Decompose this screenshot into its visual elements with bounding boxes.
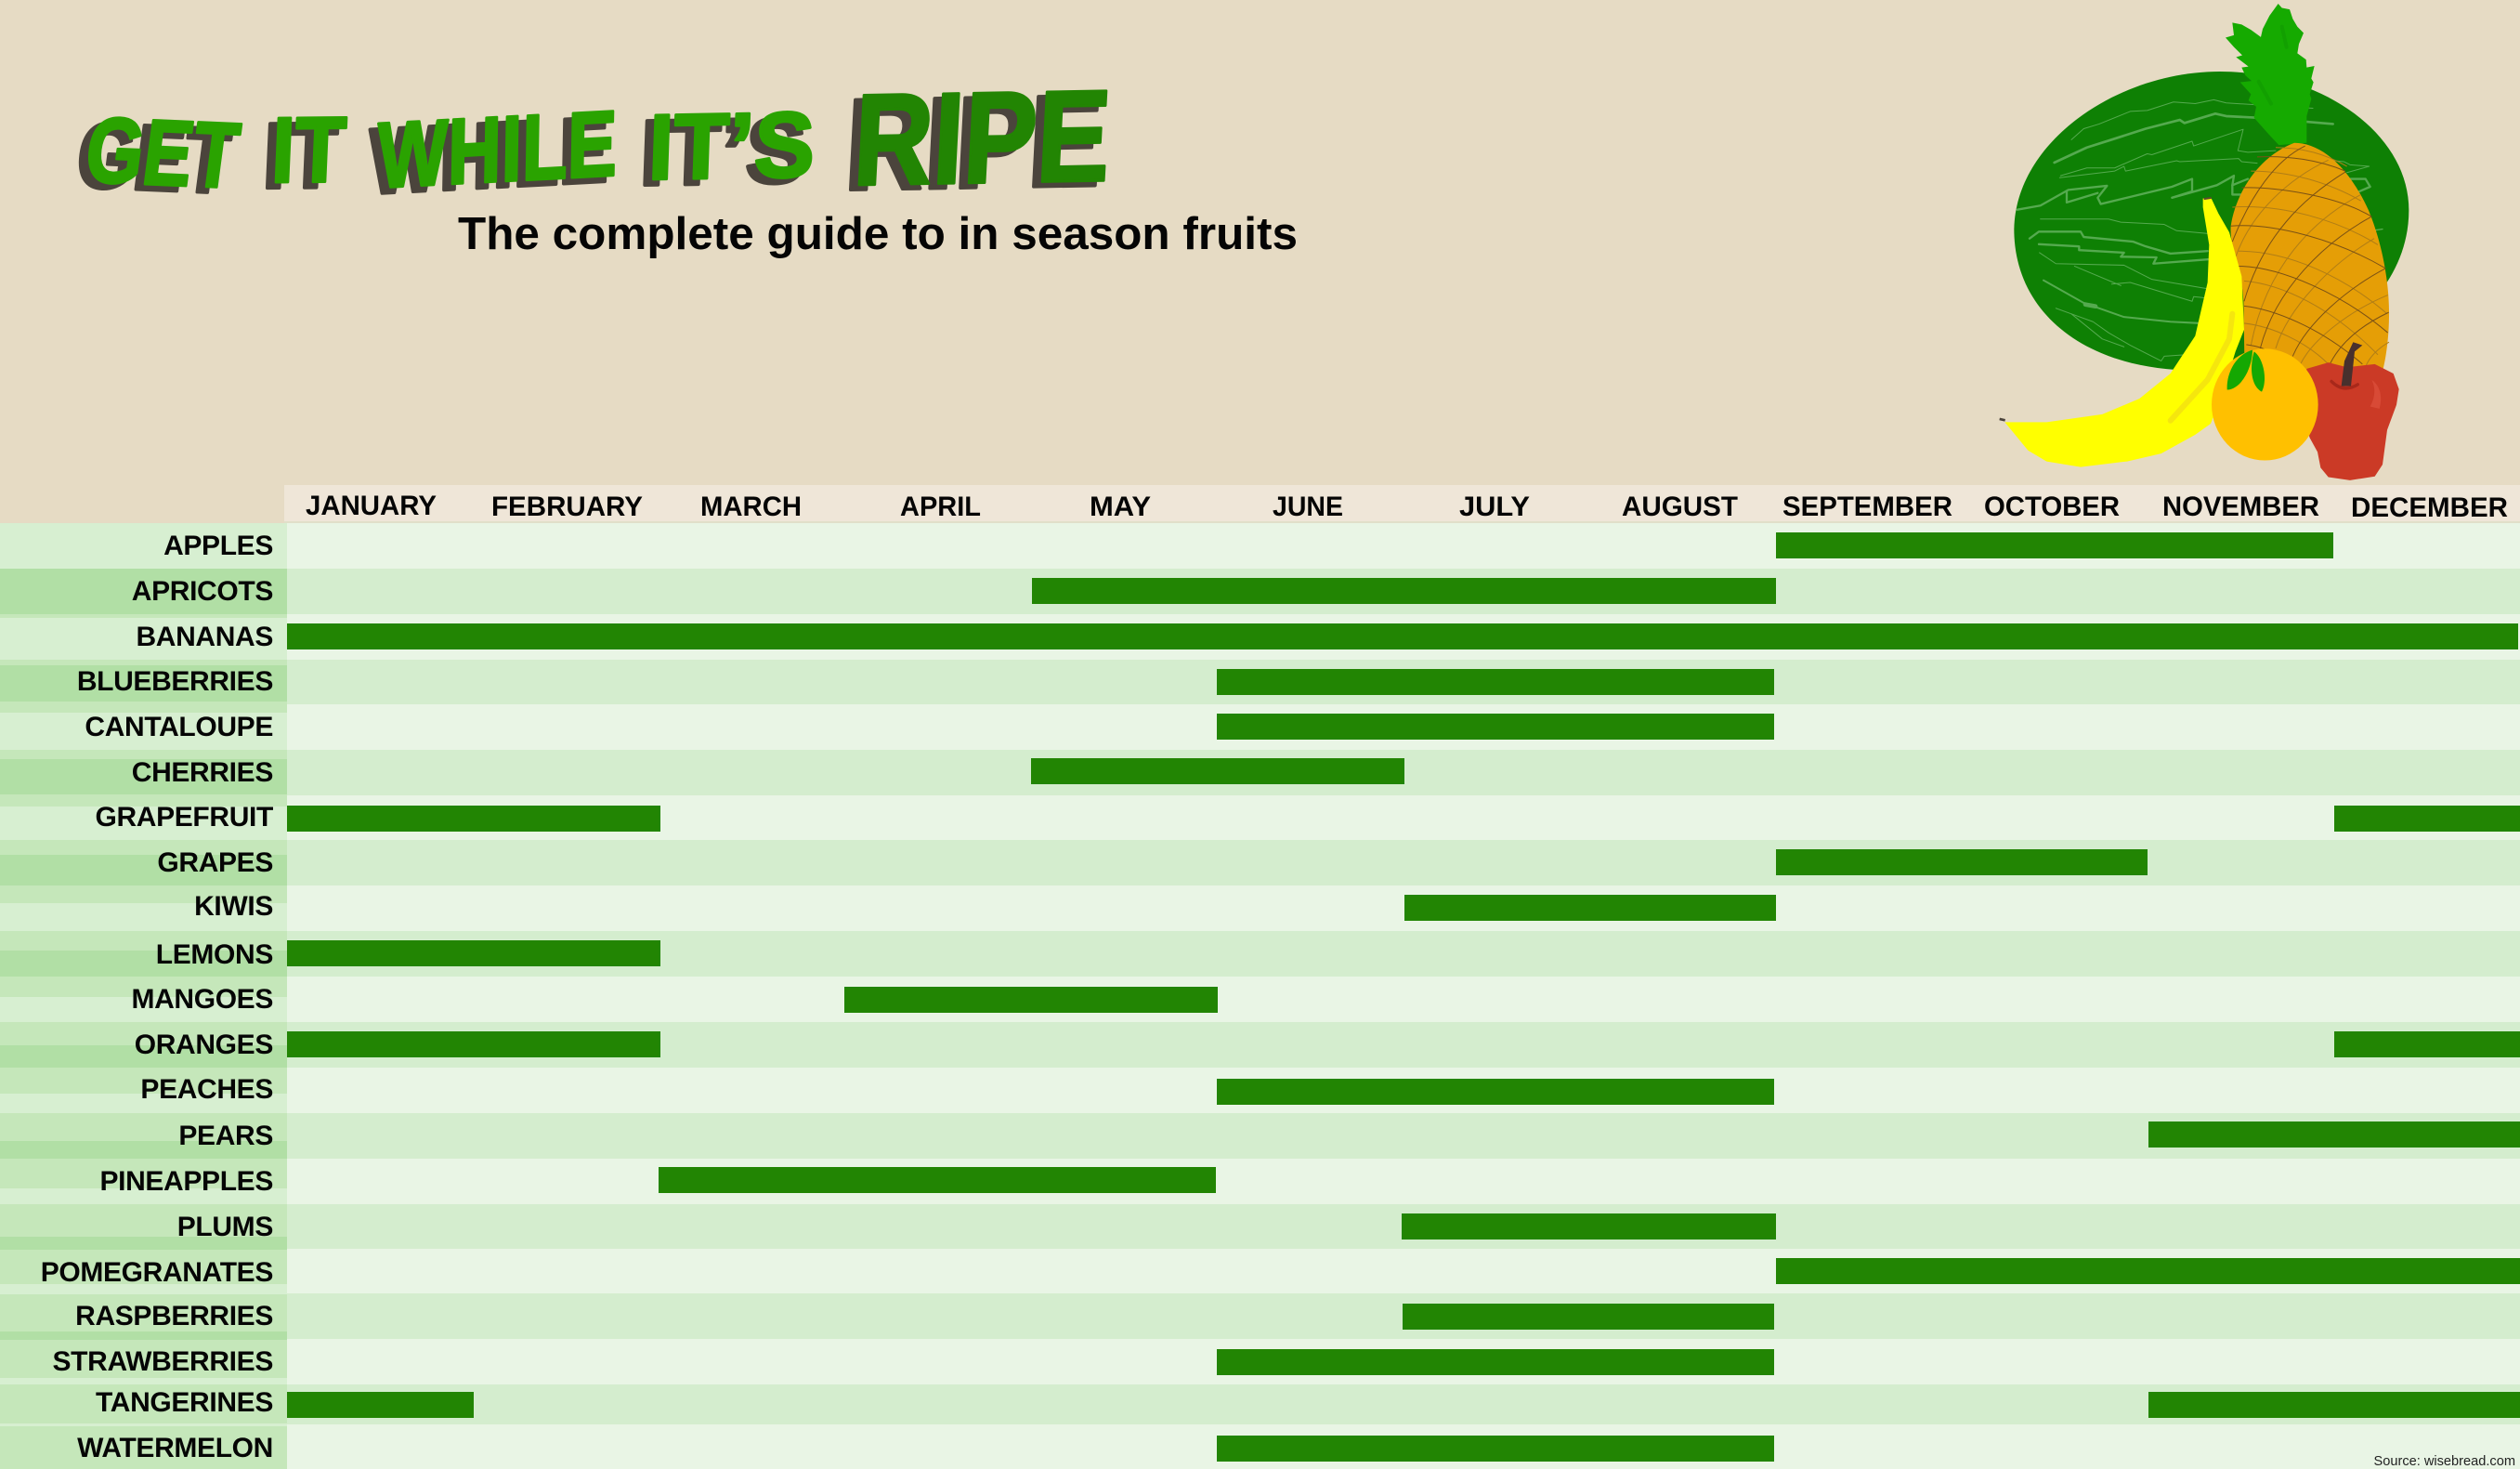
title word: GET: GET — [71, 103, 236, 214]
month labels: MARCH — [700, 492, 802, 522]
row: grapefruit: GRAPEFRUIT — [95, 802, 273, 833]
row: kiwis — [194, 885, 2520, 931]
title word: IT: IT — [261, 103, 340, 208]
month labels — [306, 491, 2508, 523]
month header band — [284, 485, 2520, 523]
row: grapefruit — [95, 795, 2520, 840]
month labels: SEPTEMBER — [1782, 492, 1952, 522]
row: mangoes: MANGOES — [131, 984, 273, 1015]
row: cantaloupe: CANTALOUPE — [85, 712, 273, 742]
apple — [2301, 342, 2399, 480]
row: pears: PEARS — [178, 1121, 273, 1151]
row: bananas — [136, 614, 2520, 660]
row: raspberries — [75, 1293, 2520, 1339]
illustration: fruit pile — [2000, 4, 2409, 480]
source note: Source: wisebread.com — [2374, 1454, 2515, 1469]
row: apples: APPLES — [163, 531, 273, 561]
row: peaches — [140, 1068, 2520, 1113]
row: strawberries — [52, 1339, 2520, 1384]
month labels: DECEMBER — [2351, 492, 2508, 523]
row: pineapples — [99, 1159, 2520, 1204]
row: cantaloupe — [85, 704, 2520, 750]
pineapple — [2226, 4, 2389, 376]
row: plums: PLUMS — [177, 1212, 273, 1242]
subtitle: The complete guide to in season fruits — [458, 209, 1298, 259]
watermelon — [2014, 72, 2409, 371]
row: plums — [177, 1204, 2520, 1249]
title word: WHILE: WHILE — [369, 98, 609, 215]
row: raspberries: RASPBERRIES — [75, 1301, 273, 1331]
season chart rows — [41, 523, 2520, 1469]
title word: RIPE: RIPE — [850, 62, 1115, 213]
title word: IT: IT — [269, 98, 348, 203]
row: apples — [163, 523, 2520, 569]
row: kiwis: KIWIS — [194, 891, 273, 922]
month labels: JUNE — [1273, 492, 1343, 522]
title word: RIPE: RIPE — [842, 67, 1105, 217]
month labels: NOVEMBER — [2162, 492, 2319, 522]
row: grapes: GRAPES — [157, 847, 273, 878]
row: lemons — [156, 931, 2520, 977]
row: watermelon — [77, 1424, 2520, 1469]
month labels: FEBRUARY — [491, 492, 643, 522]
title word: IT'S: IT’S — [646, 93, 816, 200]
row: cherries — [132, 750, 2520, 795]
row: pears — [178, 1113, 2520, 1159]
month labels: JULY — [1459, 492, 1530, 522]
row: strawberries: STRAWBERRIES — [52, 1346, 273, 1377]
row: oranges: ORANGES — [135, 1030, 273, 1060]
row: apricots: APRICOTS — [132, 576, 273, 607]
row: tangerines — [96, 1384, 2520, 1424]
row: blueberries — [77, 660, 2520, 704]
orange — [2212, 348, 2318, 461]
row: apricots — [132, 569, 2520, 614]
row: mangoes — [131, 977, 2520, 1022]
month labels: MAY — [1090, 492, 1151, 522]
title word: IT'S: IT’S — [638, 98, 808, 205]
row: lemons: LEMONS — [156, 939, 273, 970]
row: pomegranates — [41, 1249, 2520, 1293]
title — [71, 62, 1115, 217]
row: blueberries: BLUEBERRIES — [77, 666, 273, 697]
row: watermelon: WATERMELON — [77, 1433, 273, 1463]
row: peaches: PEACHES — [140, 1074, 273, 1105]
month labels: AUGUST — [1622, 492, 1738, 522]
title word: GET: GET — [80, 98, 245, 208]
row: tangerines: TANGERINES — [96, 1387, 273, 1418]
row: pomegranates: POMEGRANATES — [41, 1257, 273, 1288]
month labels: APRIL — [900, 492, 981, 522]
month labels: JANUARY — [306, 491, 437, 521]
row: oranges — [135, 1022, 2520, 1068]
row: bananas: BANANAS — [136, 622, 273, 652]
month labels: OCTOBER — [1984, 492, 2120, 522]
title word: WHILE: WHILE — [377, 91, 618, 208]
banana — [2000, 198, 2244, 467]
row: grapes — [157, 840, 2520, 885]
row: cherries: CHERRIES — [132, 757, 273, 788]
row: pineapples: PINEAPPLES — [99, 1166, 273, 1197]
fruit label column background — [0, 523, 287, 1469]
